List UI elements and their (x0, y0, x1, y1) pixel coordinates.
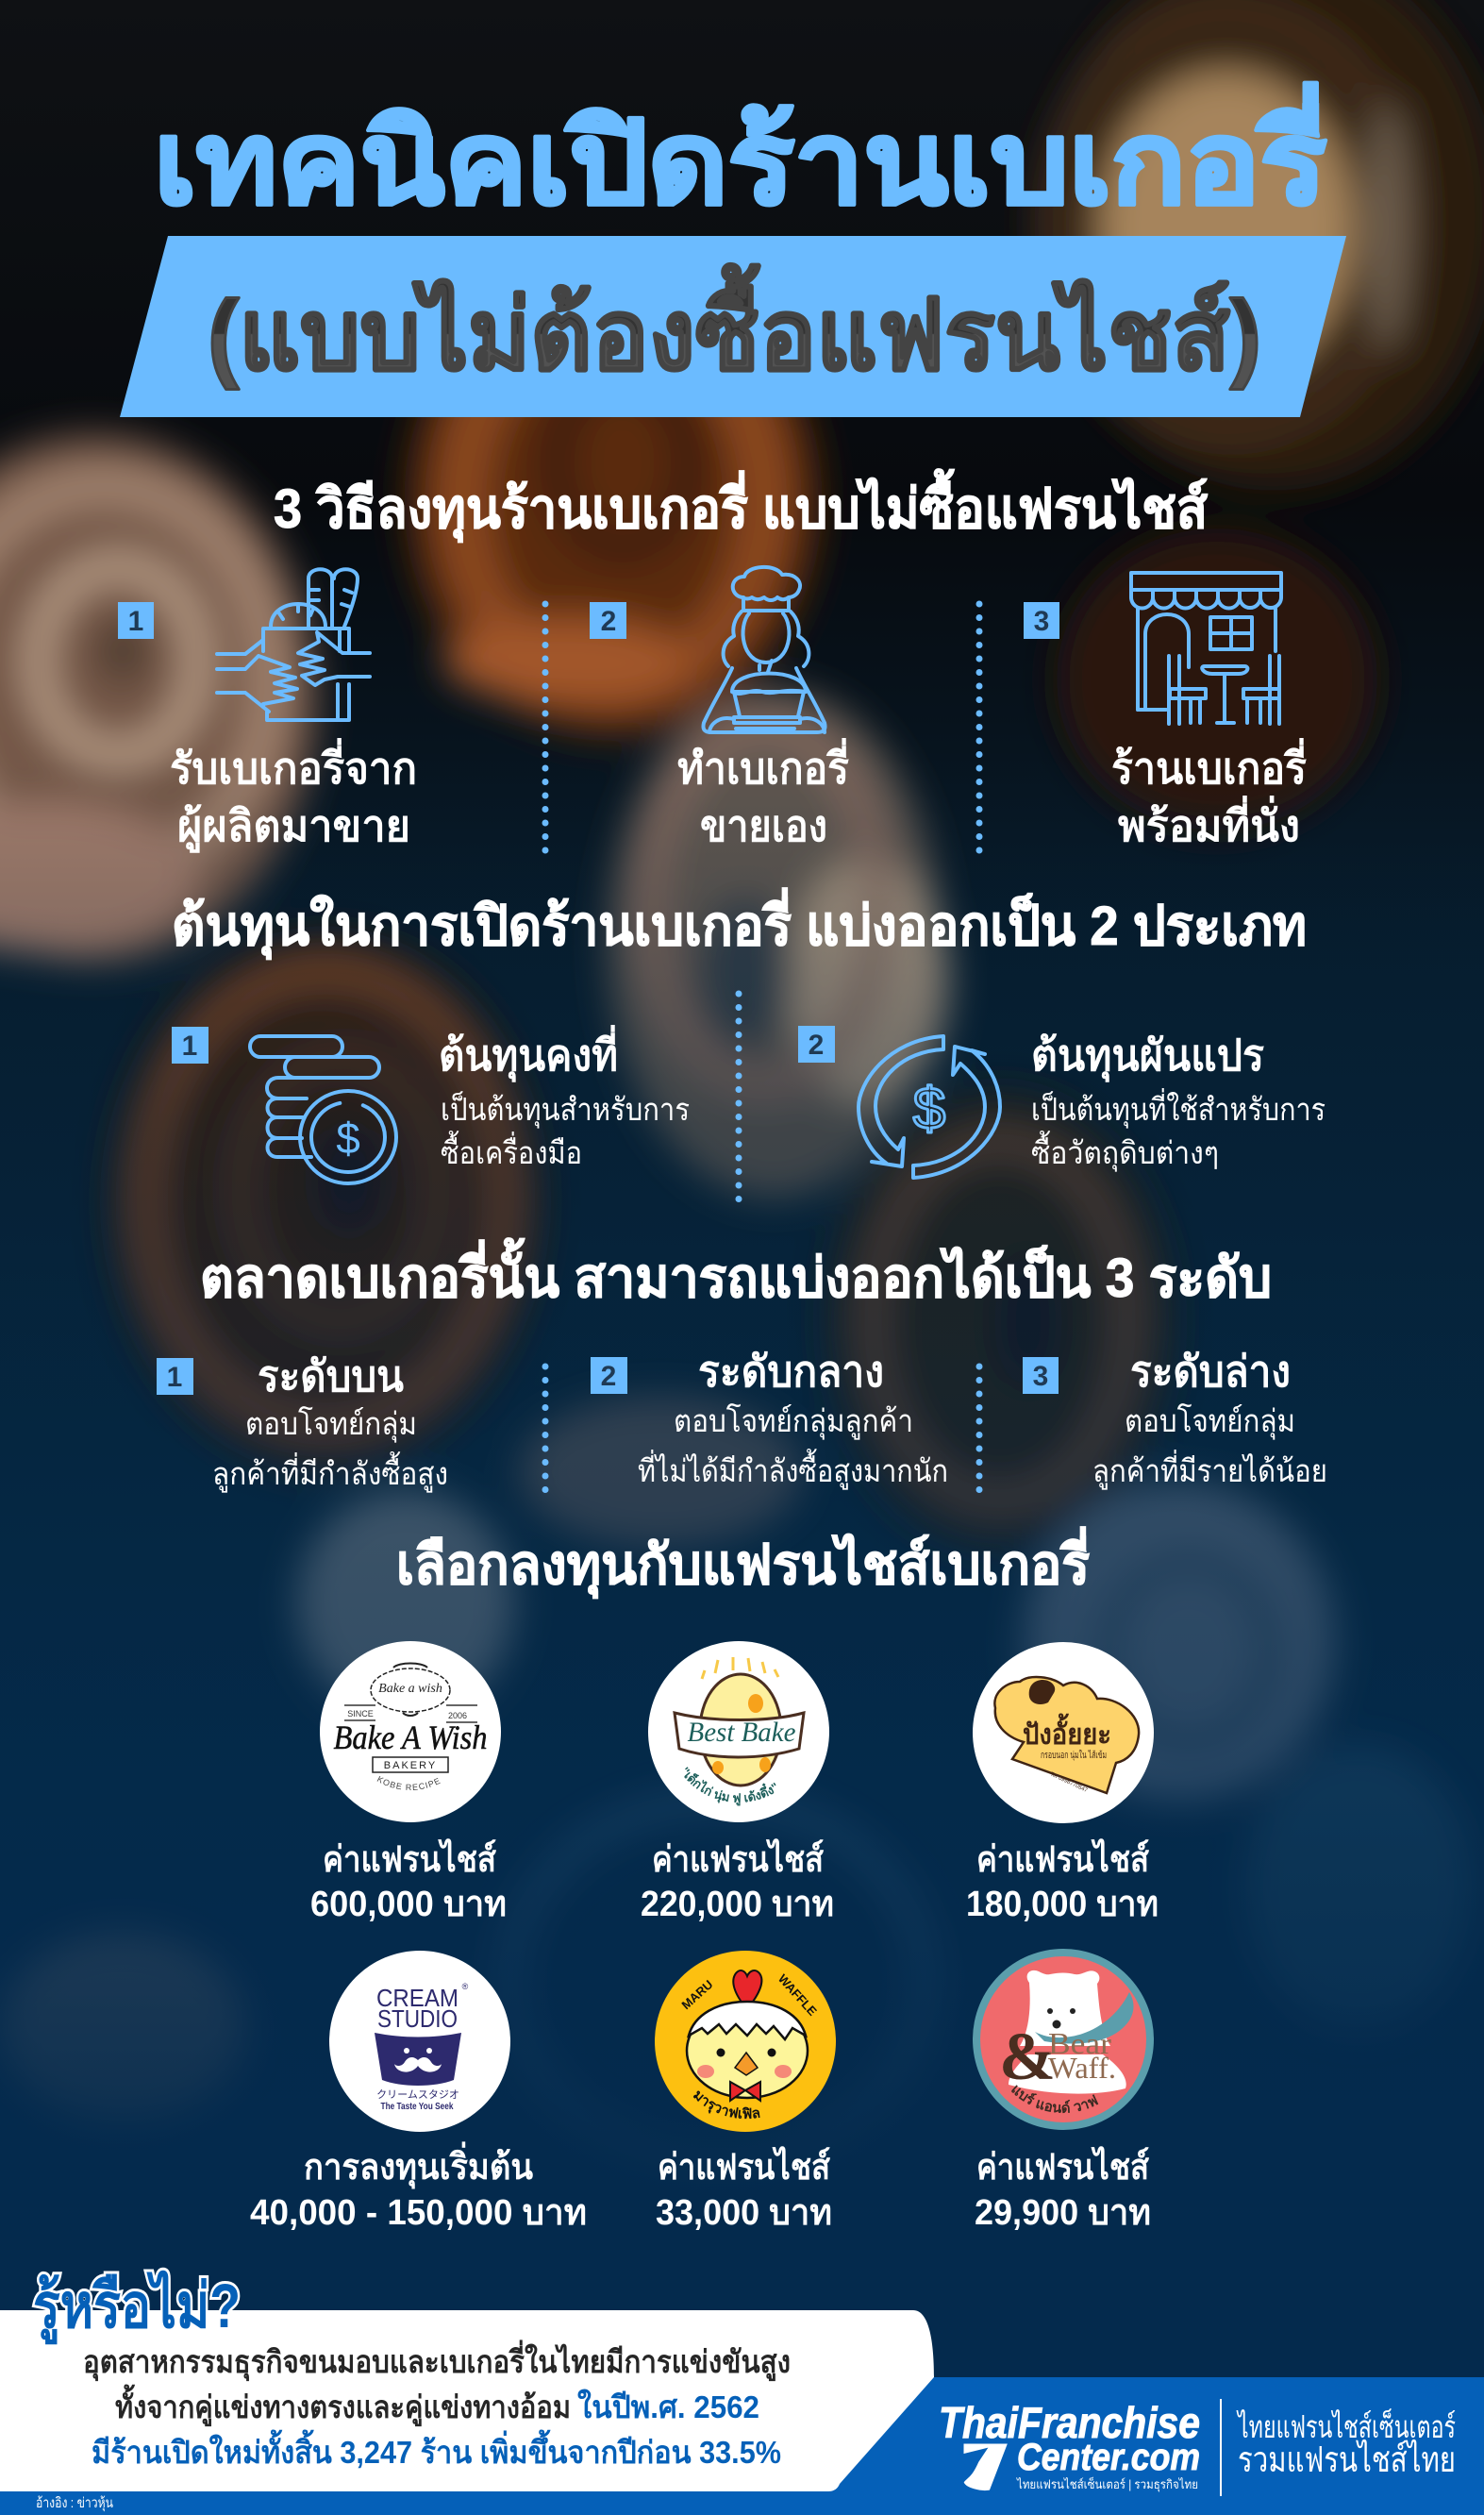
level 2: ระดับกลาง (698, 1347, 884, 1396)
franchise: Pang Ao Ya (966, 1642, 1159, 1924)
way 2: bake yourself: 2 (601, 606, 616, 637)
heading: 2 cost types: ต้นทุนในการเปิดร้านเบเกอรี่ แบ่งออกเป็น 2 ประเภท (172, 887, 1307, 961)
heading: 3 market levels: ตลาดเบเกอรี่นั้น สามารถแบ่งออกได้เป็น 3 ระดับ (200, 1238, 1272, 1309)
franchise: Bake A Wish: KOBE RECIPES (377, 1776, 441, 1790)
price: ค่าแฟรนไชส์ (976, 1838, 1150, 1880)
text (439, 1025, 690, 1170)
franchise: Bake A Wish: Bake A Wish (334, 1719, 487, 1756)
way 1: buy from producer: 1 (128, 606, 143, 637)
cost 1: fixed cost: 1 (182, 1031, 197, 1062)
level 2: 2 (601, 1361, 616, 1392)
level 3: ระดับล่าง (1130, 1347, 1291, 1396)
way 3: bakery with seating: 3 (1034, 606, 1049, 637)
price: 33,000 บาท (656, 2193, 832, 2233)
panel text: อุตสาหกรรมธุรกิจขนมอบและเบเกอรี่ในไทยมีการแข่งขันสูง (83, 2339, 791, 2382)
icon: storefront (1131, 573, 1281, 724)
divider (542, 604, 549, 852)
logo: ThaiFranchise Center: ไทยแฟรนไชส์เซ็นเตอร์ | รวมธุรกิจไทย (1016, 2475, 1198, 2492)
right lower brown (825, 1090, 1175, 1552)
label: ผู้ผลิตมาขาย (177, 801, 410, 853)
cost 2: variable cost: 2 (809, 1030, 824, 1061)
logo: ThaiFranchise Center: Center.com (1017, 2437, 1200, 2478)
orange centre (408, 264, 819, 736)
icon: circular arrows dollar: $ (913, 1077, 945, 1142)
franchise: Best Bake (641, 1641, 834, 1924)
subtitle banner: (แบบไม่ต้องซื้อแฟรนไชส์) (208, 263, 1261, 391)
level 3: ตอบโจทย์กลุ่ม (1125, 1403, 1295, 1440)
icon: coin stack: $ (336, 1114, 360, 1163)
title: เทคนิคเปิดร้านเบเกอรี่ (154, 82, 1326, 227)
text: เป็นต้นทุนสำหรับการ (441, 1091, 690, 1129)
cost 2: variable cost (798, 1026, 1326, 1178)
franchise: Bear and Waff: Bear (1048, 2026, 1111, 2060)
way 1: buy from producer (118, 569, 417, 853)
panel text: มีร้านเปิดใหม่ทั้งสิ้น 3,247 ร้าน เพิ่มขึ้นจากปีก่อน 33.5% (92, 2429, 781, 2470)
heading: 3 ways: 3 วิธีลงทุนร้านเบเกอรี่ แบบไม่ซื้อแฟรนไชส์ (274, 469, 1209, 544)
text (1031, 1031, 1326, 1172)
did you know panel (0, 2270, 934, 2491)
franchise: Maru Waffle: MARU (678, 1977, 715, 2012)
icon: baker holding cake (703, 567, 825, 732)
franchise: Bake A Wish: Bake a wish (378, 1682, 442, 1696)
way 3: bakery with seating (1024, 573, 1307, 850)
panel text (83, 2339, 791, 2470)
label: พร้อมที่นั่ง (1118, 796, 1300, 850)
price: ค่าแฟรนไชส์ (323, 1838, 497, 1880)
level 1 (157, 1351, 448, 1493)
price (641, 1838, 834, 1924)
footer blue band (0, 2377, 1484, 2515)
level 1: ลูกค้าที่มีกำลังซื้อสูง (212, 1451, 448, 1493)
left pink (0, 434, 316, 963)
cost 1: fixed cost (172, 1025, 690, 1183)
franchise: Bake A Wish: BAKERY (384, 1760, 437, 1771)
panel text: ทั้งจากคู่แข่งทางตรงและคู่แข่งทางอ้อม (115, 2384, 571, 2427)
text: ซื้อเครื่องมือ (441, 1131, 582, 1170)
subtitle banner (120, 236, 1346, 417)
franchise: Cream Studio: STUDIO (377, 2004, 458, 2033)
icon: logo arrow (962, 2442, 1009, 2492)
franchise: Bear and Waff: & (999, 2019, 1056, 2094)
level 3: 3 (1033, 1361, 1048, 1392)
franchise: Bear and Waff: Waff. (1048, 2051, 1116, 2085)
label: ร้านเบเกอรี่ (1111, 738, 1307, 793)
level 1: 1 (167, 1362, 182, 1393)
divider (542, 1366, 549, 1494)
heading: choose franchise: เลือกลงทุนกับแฟรนไชส์เบเกอรี่ (396, 1526, 1090, 1600)
franchise: Cream Studio: The Taste You Seek (381, 2102, 454, 2112)
label (170, 738, 417, 853)
franchise: Pang Ao Ya: กรอบนอก นุ่มใน ไส้เข้ม (1041, 1750, 1107, 1761)
franchise: Best Bake: "เด็กไก่ นุ่ม ฟู เด้งดึ๋ง" (684, 1767, 775, 1806)
text: ต้นทุนคงที่ (439, 1025, 618, 1082)
franchise: Cream Studio: クリームスタジオ (376, 2087, 459, 2102)
lower pale (297, 1491, 514, 1718)
level 2 (591, 1347, 948, 1490)
level 2: ตอบโจทย์กลุ่มลูกค้า (674, 1403, 913, 1440)
franchise: Bear and Waff: แบร์ แอนด์ วาฟ (1011, 2085, 1098, 2114)
price: 220,000 บาท (641, 1885, 834, 1924)
investment: 40,000 - 150,000 บาท (250, 2193, 587, 2233)
pale centre (609, 689, 939, 1199)
franchise: Bear and Waff (973, 1949, 1154, 2233)
franchise: Maru Waffle: WAFFLE (775, 1971, 820, 2019)
label: รับเบเกอรี่จาก (170, 738, 417, 793)
price (975, 2146, 1151, 2233)
franchise: Cream Studio (250, 1951, 587, 2233)
text: ต้นทุนผันแปร (1031, 1031, 1264, 1082)
panel heading: รู้หรือไม่? (33, 2270, 241, 2345)
price: 180,000 บาท (966, 1885, 1159, 1924)
level 2: ที่ไม่ได้มีกำลังซื้อสูงมากนัก (638, 1449, 948, 1490)
label (1111, 738, 1307, 850)
label: ทำเบเกอรี่ (677, 738, 849, 793)
franchise: Bake A Wish: SINCE (347, 1709, 374, 1719)
investment: การลงทุนเริ่มต้น (304, 2141, 533, 2189)
franchise: Cream Studio: CREAM (376, 1984, 459, 2012)
price: ค่าแฟรนไชส์ (658, 2146, 831, 2188)
franchise: Pang Ao Ya: ปังอั้ยยะ (1023, 1713, 1111, 1751)
text: ซื้อวัตถุดิบต่างๆ (1031, 1131, 1219, 1172)
franchise: Maru Waffle (655, 1951, 836, 2233)
icon: hands exchanging bakery bag (217, 569, 370, 720)
divider (975, 1366, 983, 1494)
text: เป็นต้นทุนที่ใช้สำหรับการ (1031, 1088, 1326, 1129)
level 3 (1023, 1347, 1327, 1490)
divider (736, 994, 742, 1213)
franchise: Bake A Wish (310, 1641, 507, 1924)
divider (975, 604, 983, 852)
top right (1047, 0, 1484, 491)
logo: ThaiFranchise Center: ThaiFranchise (939, 2398, 1200, 2447)
franchise: Bake A Wish: 2006 (448, 1711, 467, 1720)
label (677, 738, 849, 850)
label: ขายเอง (700, 801, 827, 850)
franchise: Maru Waffle: มารุวาฟเฟิล (693, 2091, 760, 2120)
franchise: Best Bake: Best Bake (687, 1717, 796, 1748)
source note: อ้างอิง : ข่าวหุ้น (36, 2495, 113, 2512)
level 1: ตอบโจทย์กลุ่ม (245, 1406, 417, 1443)
price (966, 1838, 1159, 1924)
icon: coin stack (250, 1036, 396, 1183)
left lower brown (108, 934, 542, 1472)
price: 29,900 บาท (975, 2193, 1151, 2233)
logo: ThaiFranchise Center (939, 2398, 1456, 2496)
panel text: ในปีพ.ศ. 2562 (577, 2389, 759, 2424)
price: ค่าแฟรนไชส์ (976, 2146, 1150, 2188)
level 3: ลูกค้าที่มีรายได้น้อย (1092, 1450, 1327, 1490)
price (310, 1838, 507, 1924)
level 1: ระดับบน (258, 1351, 404, 1400)
icon: circular arrows dollar (859, 1036, 1000, 1178)
way 2: bake yourself (590, 567, 849, 850)
investment (250, 2141, 587, 2233)
franchise: Cream Studio: ® (462, 1982, 469, 1991)
price (656, 2146, 832, 2233)
price: ค่าแฟรนไชส์ (652, 1838, 825, 1880)
franchise: Pang Ao Ya: Tel 0998770547 (1049, 1771, 1089, 1794)
price: 600,000 บาท (310, 1885, 507, 1924)
